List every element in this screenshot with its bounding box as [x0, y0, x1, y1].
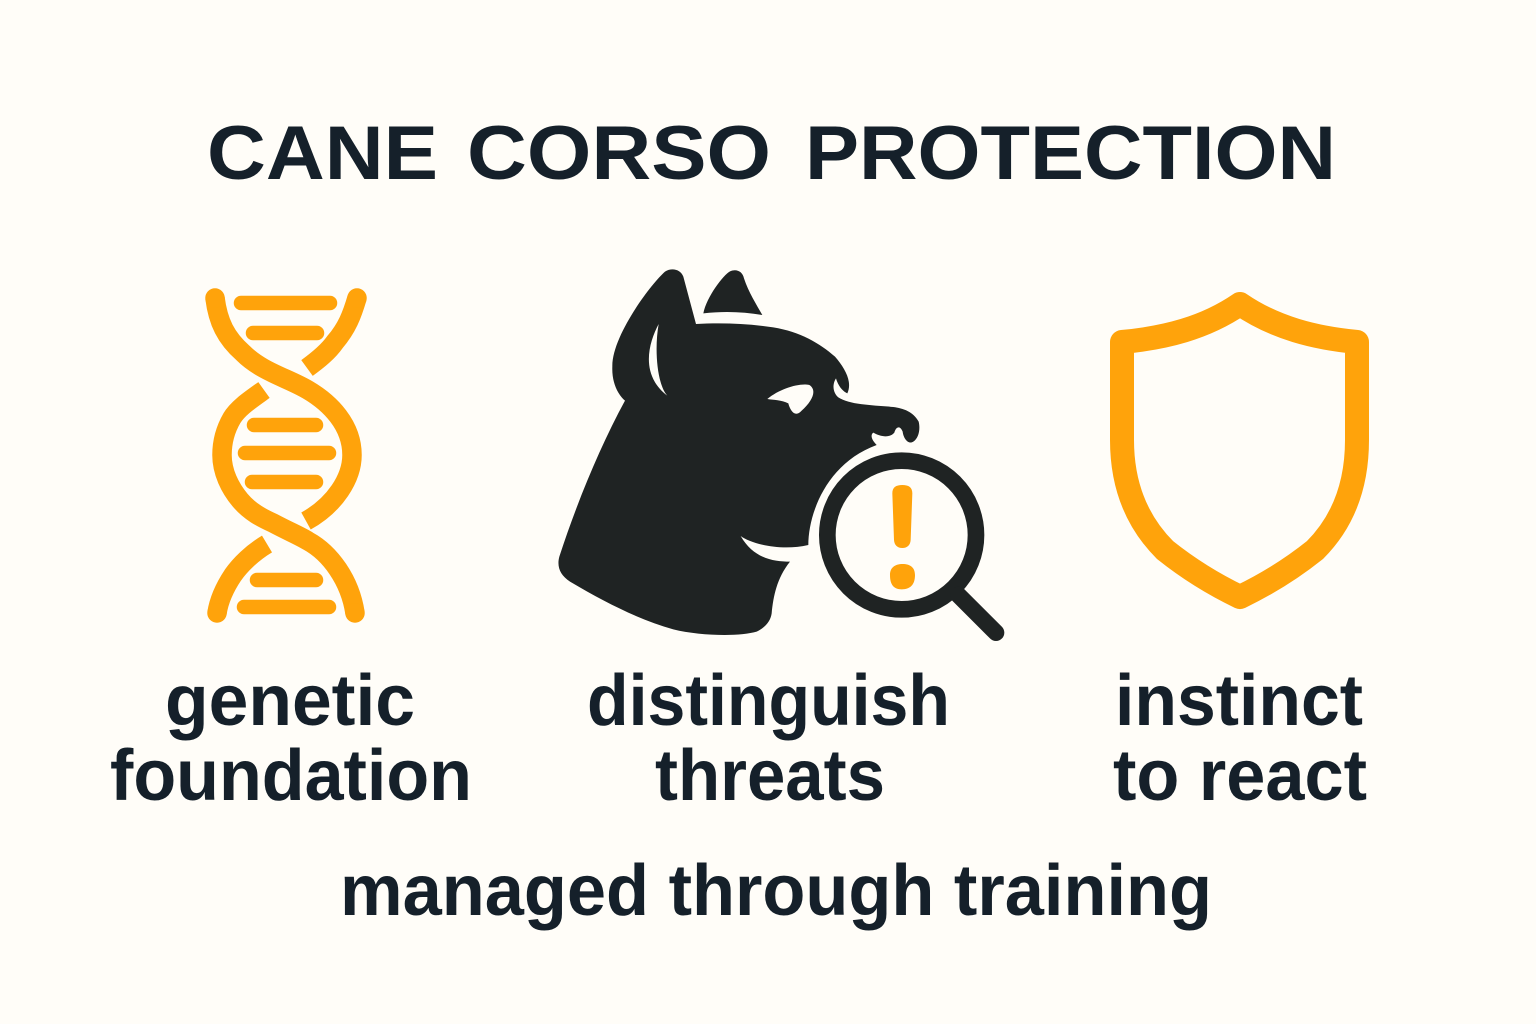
magnifier handle — [958, 595, 996, 633]
label: genetic foundation: foundation — [110, 736, 472, 816]
icon: DNA double helix — [205, 288, 367, 623]
label: instinct to react: instinct — [1115, 661, 1363, 741]
footer caption: managed through training — [340, 851, 1212, 931]
label: instinct to react: to react — [1113, 736, 1367, 816]
icon: shield — [1122, 304, 1357, 597]
label: genetic foundation: genetic — [165, 661, 415, 741]
icon: dog head silhouette with magnifying glass — [558, 269, 996, 635]
dog head — [558, 269, 919, 635]
far ear — [703, 270, 762, 315]
exclamation mark — [890, 485, 915, 589]
label: distinguish threats — [587, 661, 950, 816]
magnifying glass — [827, 461, 976, 609]
label: distinguish threats: distinguish — [587, 661, 950, 741]
label: distinguish threats: threats — [655, 736, 885, 816]
label: instinct to react — [1113, 661, 1367, 816]
label: genetic foundation — [110, 661, 472, 816]
title: CORSO — [467, 111, 771, 196]
title: PROTECTION — [805, 111, 1336, 196]
title: CANE — [207, 111, 438, 196]
title — [207, 111, 1336, 196]
